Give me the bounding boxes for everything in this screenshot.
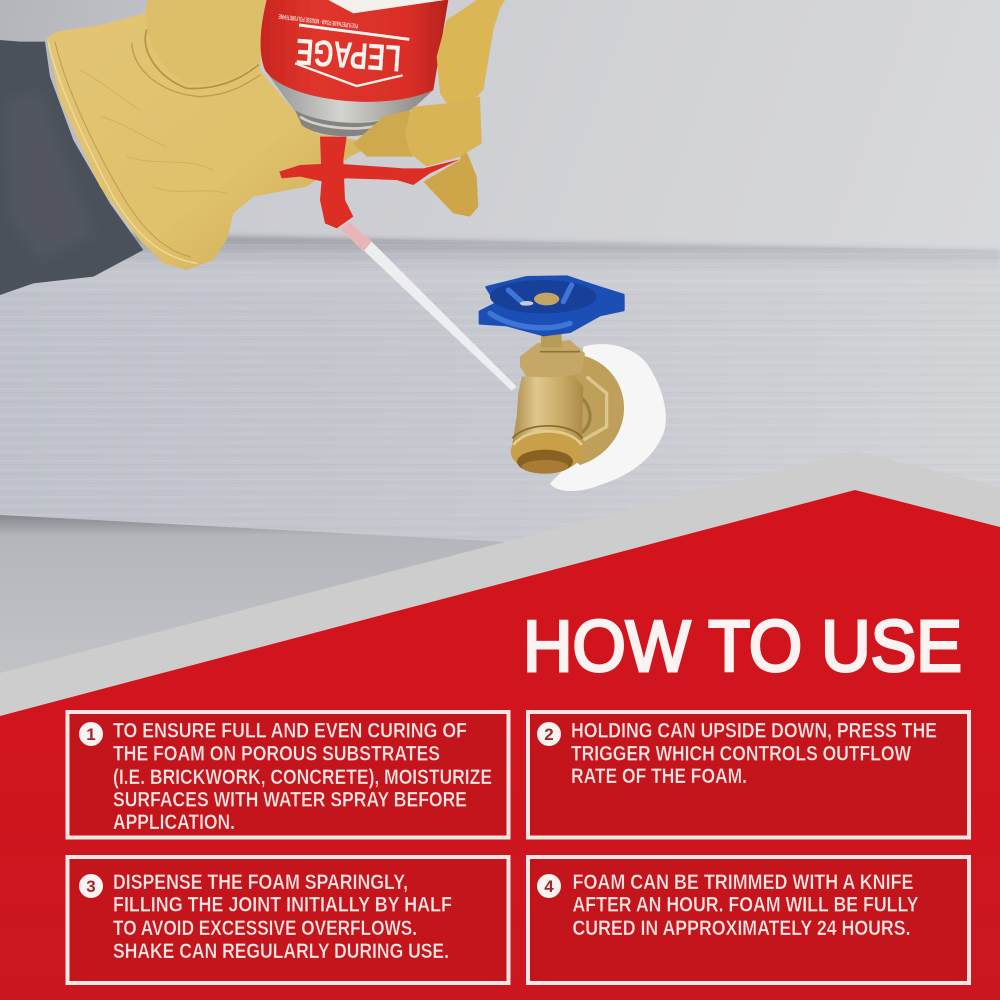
LEPAGE logo: LEPAGE [294,31,402,80]
step 3: 3 [86,877,96,896]
step 1: SURFACES WITH WATER SPRAY BEFORE [113,788,467,812]
photo: gloved hand holding can [0,0,517,391]
step 1: 1 [86,725,96,744]
title: HOW TO USE [523,607,962,687]
step 4 [528,857,969,983]
step 3: TO AVOID EXCESSIVE OVERFLOWS. [113,916,417,940]
glove shading [48,30,260,263]
glove palm [47,0,377,270]
step 3: SHAKE CAN REGULARLY DURING USE. [113,939,449,963]
opening [517,450,573,474]
step 2: RATE OF THE FOAM. [571,764,747,788]
thread [511,431,583,472]
LEPAGE logo [294,25,409,86]
right fingers [437,0,505,108]
applicator tube [340,222,517,391]
sleeve [0,40,143,295]
step 3: FILLING THE JOINT INITIALLY BY HALF [113,893,452,917]
can silver base [265,70,433,123]
step 1: TO ENSURE FULL AND EVEN CURING OF [113,718,467,742]
step 1 [68,712,508,838]
step 4: AFTER AN HOUR. FOAM WILL BE FULLY [572,893,918,917]
step 1: APPLICATION. [113,810,235,834]
gray roof band [0,451,1000,717]
brass plate [540,355,624,465]
photo: gloved hand holding can: POLYURETHANE FOAM · MOUSSE POLYURETHANE [278,12,359,29]
red panel [0,490,1000,1000]
stem [541,333,562,347]
step 4: FOAM CAN BE TRIMMED WITH A KNIFE [572,870,914,894]
blue handle [480,277,623,335]
foam gun trigger [279,137,460,228]
hex nut [520,340,585,377]
step 4: 4 [544,877,554,896]
can body [261,0,448,102]
step 3: DISPENSE THE FOAM SPARINGLY, [113,870,408,894]
step 2: 2 [544,725,554,744]
step 4: CURED IN APPROXIMATELY 24 HOURS. [572,916,910,940]
step 2: TRIGGER WHICH CONTROLS OUTFLOW [571,742,912,766]
step 2 [528,712,969,838]
spout [512,375,583,448]
photo: hose bib with foam [480,277,666,491]
foam ring [550,344,666,491]
step 1: (I.E. BRICKWORK, CONCRETE), MOISTURIZE [113,765,492,789]
step 3 [68,857,508,983]
step 1: THE FOAM ON POROUS SUBSTRATES [113,742,440,766]
can cap white [328,0,445,13]
photo: vinyl siding background [0,0,1000,720]
